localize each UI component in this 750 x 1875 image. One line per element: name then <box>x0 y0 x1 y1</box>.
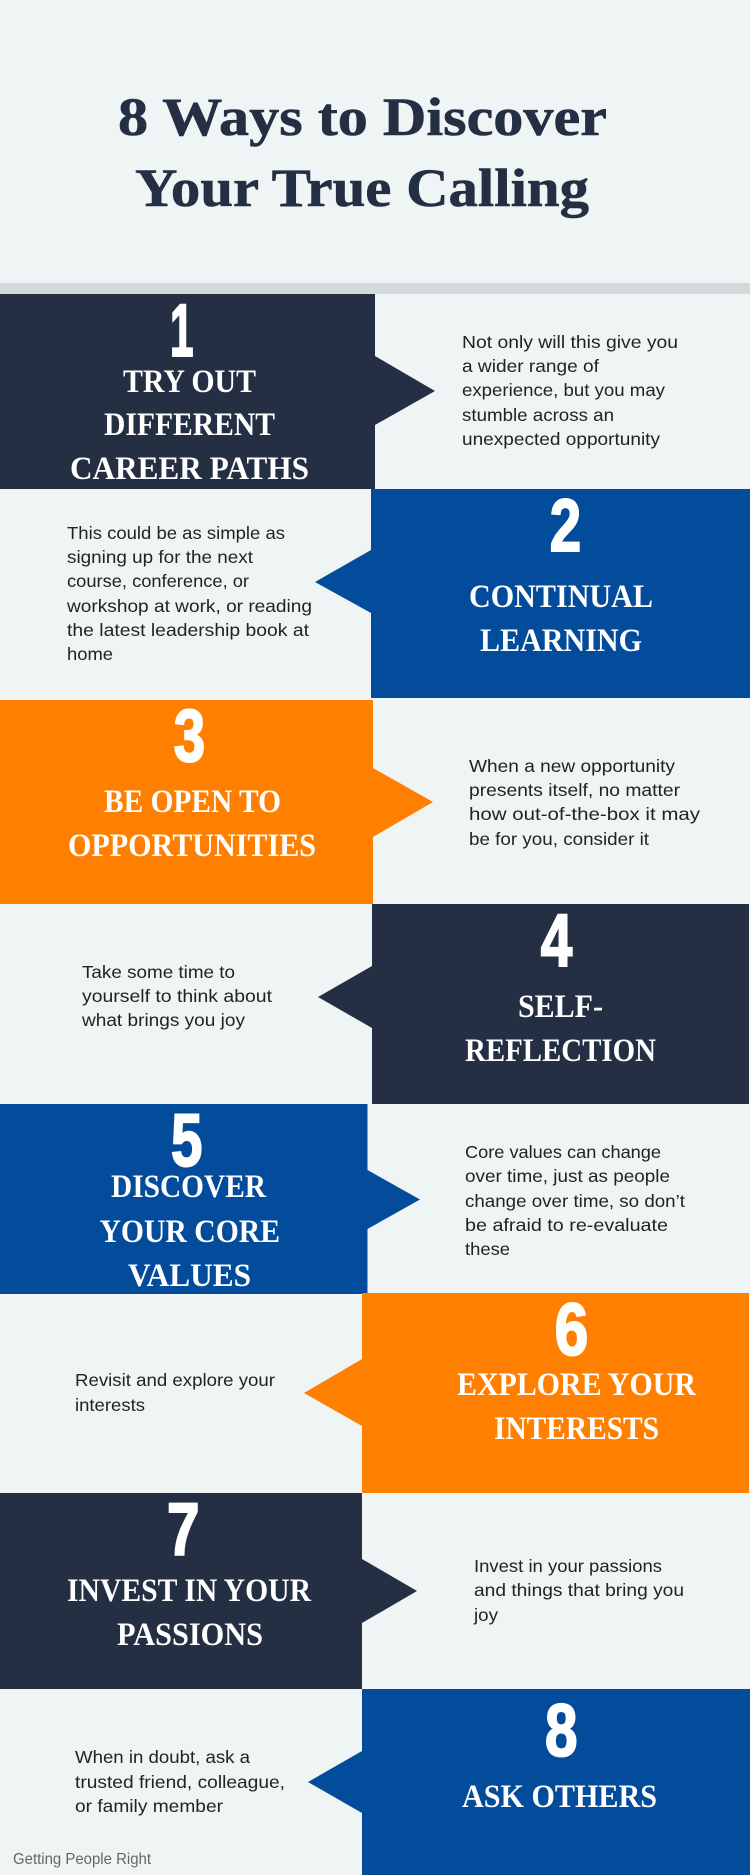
description 2: course, conference, or <box>67 571 249 591</box>
heading 3: OPPORTUNITIES <box>68 828 316 864</box>
panel 3 arrow block <box>0 700 433 904</box>
description 5 <box>465 1142 685 1259</box>
description 5: over time, just as people <box>465 1166 670 1186</box>
panel 7: invest in your passions <box>0 1488 684 1689</box>
description 1: unexpected opportunity <box>462 429 660 449</box>
description 3: When a new opportunity <box>469 756 675 776</box>
description 1: experience, but you may <box>462 380 665 400</box>
panel 8 arrow block <box>308 1689 750 1875</box>
number 1: 1 <box>170 289 194 372</box>
heading 2: CONTINUAL <box>469 579 653 615</box>
description 1: Not only will this give you <box>462 332 678 352</box>
footer credit: Getting People Right <box>13 1851 152 1868</box>
heading 7: PASSIONS <box>117 1617 263 1653</box>
description 1: a wider range of <box>462 356 599 376</box>
heading 1 <box>70 364 309 487</box>
description 6: Revisit and explore your <box>75 1370 275 1390</box>
panel 6: explore your interests <box>75 1288 749 1493</box>
description 2: signing up for the next <box>67 547 253 567</box>
description 7 <box>473 1556 684 1625</box>
heading 5 <box>100 1169 280 1294</box>
description 2: home <box>67 644 113 664</box>
panel 4 arrow block <box>318 904 749 1104</box>
description 5: Core values can change <box>465 1142 661 1162</box>
panel 5 arrow block <box>0 1104 420 1294</box>
description 6 <box>75 1370 275 1415</box>
description 8: or family member <box>75 1796 223 1816</box>
heading 5: YOUR CORE <box>100 1214 280 1250</box>
number 8: 8 <box>545 1689 578 1772</box>
description 7: and things that bring you <box>474 1580 684 1600</box>
heading 4: SELF- <box>518 989 603 1025</box>
number 4: 4 <box>541 899 572 982</box>
description 4: what brings you joy <box>81 1010 245 1030</box>
heading 4 <box>465 989 656 1069</box>
description 2: This could be as simple as <box>67 523 285 543</box>
description 1: stumble across an <box>462 405 614 425</box>
heading 1: CAREER PATHS <box>70 451 309 487</box>
panel 3: be open to opportunities <box>0 694 700 904</box>
description 5: be afraid to re-evaluate <box>465 1215 668 1235</box>
heading 5: VALUES <box>128 1258 251 1294</box>
number 7: 7 <box>167 1488 200 1571</box>
heading 2: LEARNING <box>480 623 642 659</box>
panel 2 arrow block <box>315 489 750 698</box>
heading 1: DIFFERENT <box>104 407 275 443</box>
heading 5: DISCOVER <box>111 1169 267 1205</box>
description 6: interests <box>75 1395 145 1415</box>
description 5: change over time, so don’t <box>465 1191 685 1211</box>
description 3 <box>469 756 700 849</box>
description 7: Invest in your passions <box>474 1556 662 1576</box>
title: Your True Calling <box>135 158 589 218</box>
heading 6: EXPLORE YOUR <box>457 1367 697 1403</box>
panel 7 arrow block <box>0 1493 417 1689</box>
description 1 <box>462 332 678 449</box>
description 3: how out-of-the-box it may <box>469 804 700 824</box>
number 6: 6 <box>555 1288 588 1371</box>
panel 5: discover your core values <box>0 1099 685 1294</box>
heading 6 <box>457 1367 697 1447</box>
description 4: yourself to think about <box>82 986 272 1006</box>
description 4: Take some time to <box>82 962 235 982</box>
title <box>118 87 607 218</box>
description 5: these <box>465 1239 510 1259</box>
heading 3: BE OPEN TO <box>104 784 281 820</box>
description 8 <box>75 1747 285 1816</box>
heading 4: REFLECTION <box>465 1033 656 1069</box>
number 2: 2 <box>550 484 581 567</box>
panel 1: try out different career paths <box>0 289 678 489</box>
description 3: be for you, consider it <box>469 829 649 849</box>
description 2: the latest leadership book at <box>67 620 309 640</box>
panel 6 arrow block <box>304 1293 749 1493</box>
number 5: 5 <box>171 1099 202 1182</box>
heading 7: INVEST IN YOUR <box>67 1573 312 1609</box>
description 2: workshop at work, or reading <box>66 596 312 616</box>
description 4 <box>81 962 272 1030</box>
panel 2: continual learning <box>66 484 750 698</box>
heading 1: TRY OUT <box>123 364 256 400</box>
panel 8: ask others <box>75 1689 750 1875</box>
description 7: joy <box>473 1605 498 1625</box>
description 8: trusted friend, colleague, <box>75 1772 285 1792</box>
description 8: When in doubt, ask a <box>75 1747 250 1767</box>
heading 7 <box>67 1573 312 1653</box>
panel 4: self-reflection <box>81 899 749 1104</box>
number 3: 3 <box>174 694 205 777</box>
title: 8 Ways to Discover <box>118 87 607 147</box>
heading 3 <box>68 784 316 864</box>
description 2 <box>66 523 312 664</box>
heading 8: ASK OTHERS <box>462 1779 657 1815</box>
heading 6: INTERESTS <box>494 1411 659 1447</box>
heading 2 <box>469 579 653 659</box>
panel 1 arrow block <box>0 294 435 489</box>
description 3: presents itself, no matter <box>469 780 680 800</box>
